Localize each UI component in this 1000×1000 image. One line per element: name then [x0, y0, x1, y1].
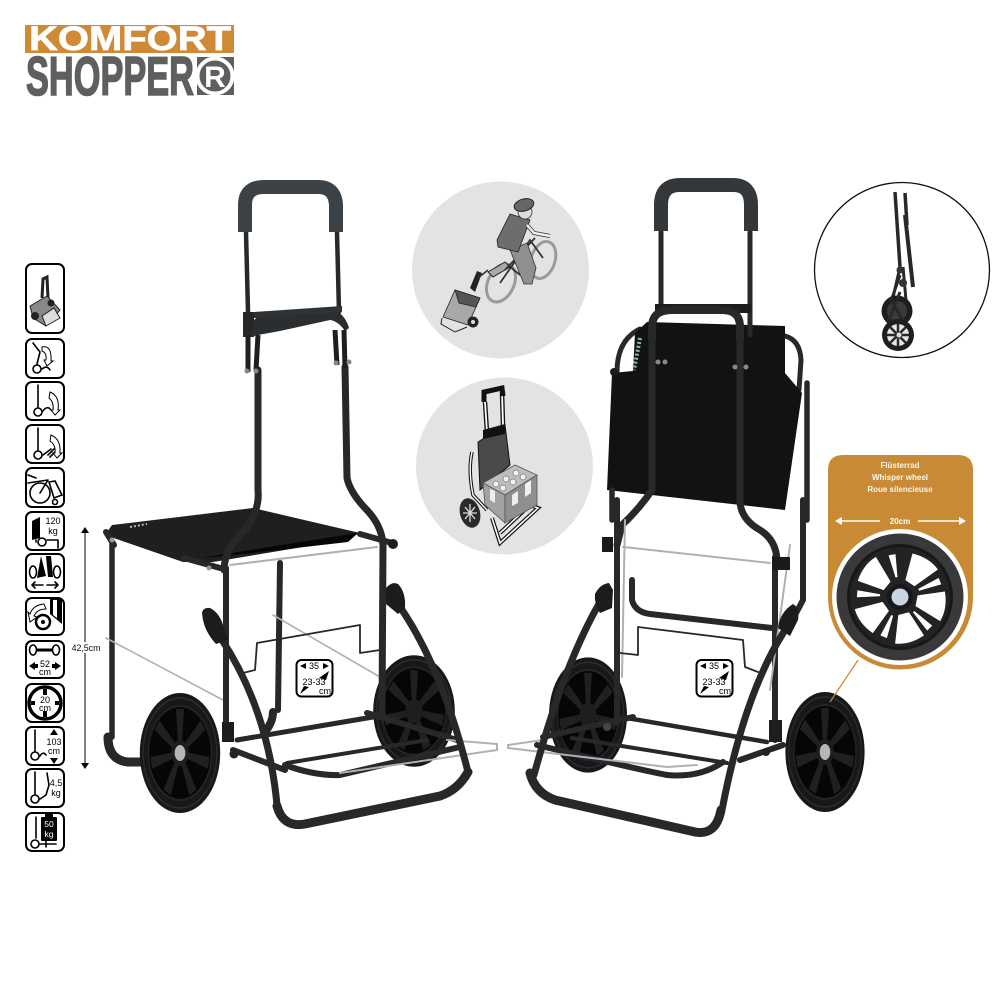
trolley: open seat view: [105, 187, 497, 825]
icon: 20 cm wheel: [26, 684, 64, 722]
callout: whisper wheel: [828, 455, 973, 670]
icon: wheel track width: [26, 554, 64, 592]
upper handle: [245, 187, 339, 312]
logo: R: [204, 61, 226, 94]
icon: rotating wheel: [26, 598, 64, 635]
front frame and tall tubes: [222, 367, 497, 775]
front wheel: [140, 693, 220, 813]
icon: 52 cm width: [26, 641, 64, 678]
icon: 4,5 kg weight: [26, 769, 64, 807]
icon: climbing stairs 2: [26, 382, 64, 420]
rear wheel: [373, 655, 455, 767]
height dimension arrow: 42,5cm: [72, 643, 100, 653]
callout text: Flüsterrad: [880, 461, 920, 470]
rear frame tubes: [106, 543, 380, 762]
circle illustration: trolley with bottle crate: [416, 378, 593, 554]
wheel diameter arrow: [835, 517, 966, 526]
callout connector line: [830, 660, 858, 702]
size badge: cm: [319, 686, 331, 696]
logo: [25, 20, 234, 107]
icon: 4,5 kg weight: 4,5: [50, 778, 62, 788]
icon: 120 kg seat load: [26, 512, 64, 550]
upper handle: [652, 185, 751, 370]
icon: bicycle towing: [26, 468, 64, 507]
callout text: Roue silencieuse: [867, 485, 933, 494]
seat: [105, 508, 398, 570]
logo: SHOPPER: [26, 45, 194, 107]
front arm and foot rest: [202, 583, 468, 825]
logo: KOMFORT: [29, 20, 231, 58]
front wheel: [785, 692, 865, 812]
icon: climbing stairs 3: [26, 425, 64, 463]
height dimension arrow: [71, 527, 101, 769]
icon: 20 cm wheel: 20: [40, 695, 50, 705]
front arms and foot rest: [530, 583, 798, 833]
callout text: [867, 461, 933, 494]
icon: 103 cm height: 103: [46, 737, 62, 747]
size badge: 35: [709, 661, 719, 671]
lower handle: [243, 306, 352, 374]
icon: 50 kg load: [26, 813, 64, 851]
rear wheel: [549, 657, 627, 773]
icon: 52 cm width: 52: [40, 659, 50, 669]
icon: 20 cm wheel: cm: [39, 703, 51, 713]
frame tubes: [508, 310, 807, 775]
icon: 120 kg seat load: 120: [45, 516, 61, 526]
icon: 50 kg load: 50: [44, 819, 54, 829]
size badge: 35: [309, 661, 319, 671]
size badge: 23-33: [302, 677, 326, 687]
wheel detail: [832, 529, 968, 665]
circle photo: folded trolley: [814, 182, 990, 358]
circle illustration: cyclist towing trolley: [412, 182, 589, 358]
icon: 103 cm height: [26, 727, 64, 765]
size badge: [696, 660, 732, 696]
size badge: [296, 660, 332, 696]
icon: 103 cm height: cm: [48, 746, 60, 756]
icon: 52 cm width: cm: [39, 667, 51, 677]
icon: climbing stairs 1: [26, 339, 64, 378]
callout text: Whisper wheel: [872, 473, 928, 482]
icon: folded trolley with crate: [26, 264, 64, 333]
icon: 120 kg seat load: kg: [48, 526, 58, 536]
feature icon column: [26, 264, 64, 851]
size badge: cm: [719, 686, 731, 696]
trolley: folded seat back view: [508, 185, 865, 833]
wheel diameter arrow: 20cm: [890, 517, 910, 526]
icon: 4,5 kg weight: kg: [51, 788, 61, 798]
icon: 50 kg load: kg: [45, 829, 54, 839]
size badge: 23-33: [702, 677, 726, 687]
seat fabric back: [607, 322, 802, 510]
